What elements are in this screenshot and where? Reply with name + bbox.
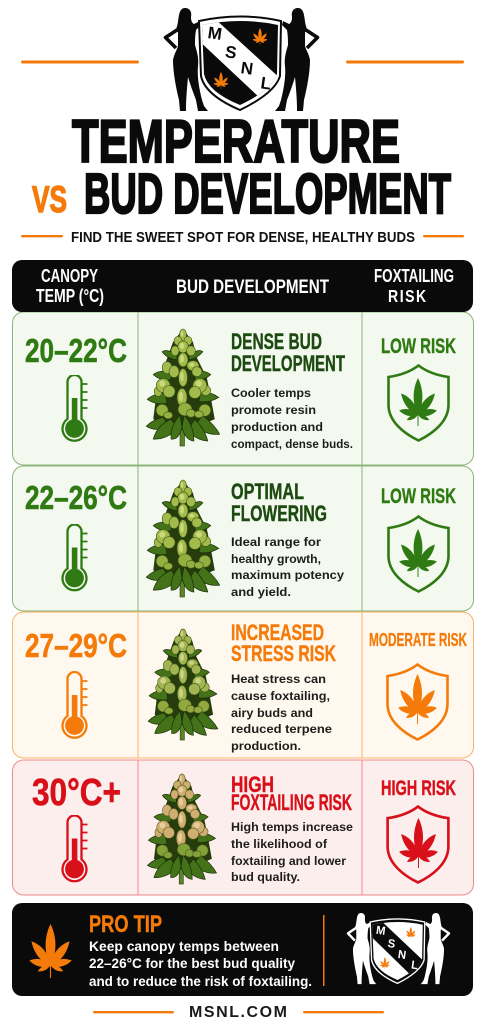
bud — [146, 329, 220, 446]
table header: FOXTAILING — [374, 266, 454, 286]
temperature: 20–22°C — [25, 332, 127, 369]
row 2: 22-26C green — [12, 466, 474, 611]
heading — [231, 772, 352, 815]
heading: FOXTAILING RISK — [231, 790, 352, 815]
description: bud quality. — [231, 870, 300, 884]
heading: FLOWERING — [231, 501, 327, 526]
description — [231, 820, 353, 884]
pro tip text: Keep canopy temps between — [89, 938, 279, 954]
heading: DEVELOPMENT — [231, 351, 345, 376]
risk label: LOW RISK — [381, 335, 456, 358]
pro tip text: and to reduce the risk of foxtailing. — [89, 973, 312, 989]
description — [231, 535, 344, 599]
description: compact, dense buds. — [231, 437, 353, 451]
risk shield — [388, 516, 448, 592]
description: production. — [231, 739, 301, 753]
description: Heat stress can — [231, 672, 326, 686]
description: the likelihood of — [231, 837, 328, 851]
icon: orange leaf — [29, 924, 72, 978]
footer: MSNL.COM — [189, 1004, 287, 1021]
description: maximum potency — [231, 568, 344, 582]
row 4: 30C+ red — [12, 760, 474, 895]
risk shield — [388, 807, 448, 882]
white logo — [348, 913, 449, 984]
table header: CANOPY — [41, 266, 98, 286]
description: production and — [231, 420, 323, 434]
description: reduced terpene — [231, 722, 332, 736]
description: High temps increase — [231, 820, 353, 834]
description: healthy growth, — [231, 552, 321, 566]
heading — [231, 479, 327, 526]
description: cause foxtailing, — [231, 689, 330, 703]
pro tip text: 22–26°C for the best bud quality — [89, 955, 295, 971]
crest shield — [195, 10, 282, 110]
description: Ideal range for — [231, 535, 321, 549]
bud — [148, 629, 218, 740]
row 1: 20-22C green — [12, 312, 474, 465]
subtitle: FIND THE SWEET SPOT FOR DENSE, HEALTHY BUDS — [71, 229, 415, 246]
row 3: 27-29C orange — [12, 612, 474, 758]
white logo: N — [397, 949, 407, 962]
risk label: LOW RISK — [381, 485, 456, 508]
bud — [146, 480, 220, 597]
description: and yield. — [231, 585, 291, 599]
table header: BUD DEVELOPMENT — [176, 276, 329, 298]
temperature: 30°C+ — [32, 772, 121, 814]
white logo: M — [375, 925, 386, 938]
table header: RISK — [388, 286, 428, 306]
thermometer — [62, 375, 88, 441]
heading: DENSE BUD — [231, 329, 322, 354]
pro tip text — [89, 938, 312, 989]
thermometer — [62, 524, 88, 590]
description — [231, 386, 353, 451]
temperature: 22–26°C — [25, 479, 127, 516]
pro tip heading: PRO TIP — [89, 911, 162, 938]
white logo: L — [410, 959, 419, 972]
heading: STRESS RISK — [231, 641, 336, 666]
description — [231, 672, 332, 753]
description: promote resin — [231, 403, 316, 417]
crest shield: L — [259, 73, 272, 94]
crest shield: S — [224, 42, 238, 63]
bud — [147, 774, 216, 884]
white logo: S — [387, 938, 396, 951]
title — [32, 108, 451, 226]
logo: MSNL crest — [166, 8, 318, 111]
table header — [12, 260, 473, 312]
temperature: 27–29°C — [25, 627, 127, 664]
description: airy buds and — [231, 706, 313, 720]
left figure — [166, 8, 208, 111]
header rules — [21, 60, 464, 64]
right figure — [275, 8, 318, 111]
title: VS — [32, 179, 67, 220]
table header: TEMP (°C) — [36, 286, 104, 306]
thermometer — [62, 816, 88, 881]
heading: INCREASED — [231, 620, 324, 645]
crest shield: M — [207, 23, 223, 44]
pro tip panel — [12, 903, 473, 996]
description: foxtailing and lower — [231, 854, 346, 868]
description: Cooler temps — [231, 386, 311, 400]
risk shield — [388, 664, 448, 740]
crest shield: N — [240, 58, 254, 79]
thermometer — [62, 672, 88, 738]
risk shield — [388, 366, 448, 440]
heading: OPTIMAL — [231, 479, 304, 504]
heading — [231, 620, 336, 666]
heading: HIGH — [231, 772, 274, 797]
heading — [231, 329, 345, 376]
